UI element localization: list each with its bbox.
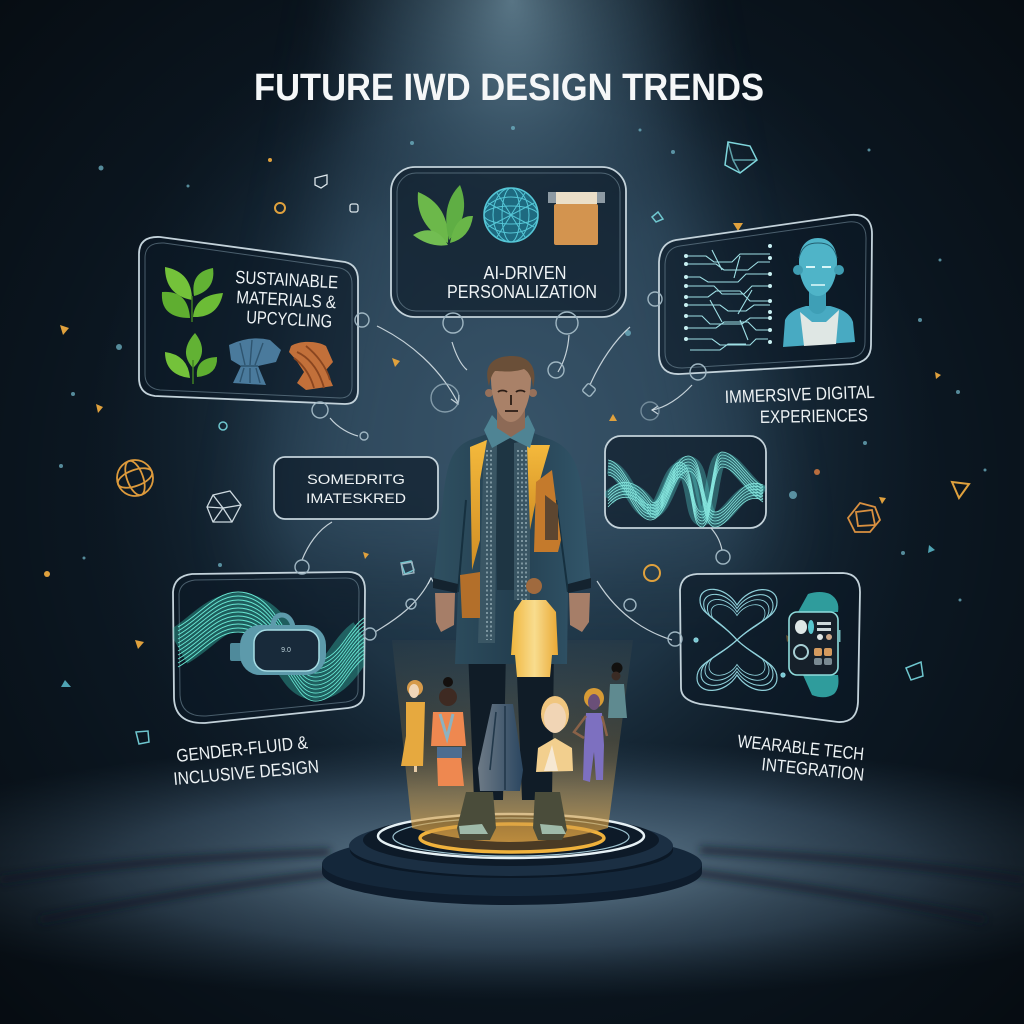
title: FUTURE IWD DESIGN TRENDS: [254, 67, 764, 109]
label: sustainable materials: MATERIALS &: [236, 287, 337, 312]
figure: dark coat on hanger: [478, 704, 523, 791]
icon: green leaves: [413, 185, 473, 246]
icon: VR headset: [230, 615, 326, 675]
floating particles: [44, 126, 986, 744]
label: AI-driven personalization: AI-DRIVEN: [484, 263, 566, 283]
label: AI-driven personalization: [447, 263, 597, 302]
figure: yellow dress left: [401, 680, 425, 772]
figure: orange outfit: [431, 677, 466, 786]
icon: folded denim garment: [229, 338, 281, 385]
chart: teal waveform ribbons: [608, 452, 763, 527]
cuffs: [433, 578, 591, 593]
gold lapels: [470, 440, 487, 570]
icon: VR headset: 9.0: [281, 647, 291, 654]
icon: orange polyhedron right: [848, 503, 880, 532]
icon: large green leaves: [162, 267, 223, 322]
scarf strips: [478, 440, 530, 643]
icon: orange wireframe sphere left: [115, 458, 155, 498]
icon: teal digital avatar: [783, 238, 855, 347]
icon: knot line art: [694, 589, 785, 690]
label: box text: [306, 471, 406, 506]
platform: [322, 814, 702, 905]
neck and head: [497, 395, 525, 437]
icon: tan fabric jar: [548, 192, 605, 245]
label: gender-fluid and inclusive design: GENDER-FLUID &: [175, 732, 309, 766]
connector arrows and nodes: [295, 292, 730, 646]
label: box text: IMATESKRED: [306, 490, 406, 506]
label: AI-driven personalization: PERSONALIZATION: [447, 282, 597, 302]
panel: sustainable materials and upcycling: [139, 237, 358, 404]
chart: teal flowing ribbon: [178, 592, 364, 701]
icon: circuit board traces: [684, 244, 772, 350]
label: wearable tech integration: [737, 731, 865, 785]
hands: [435, 593, 455, 632]
shirt: [494, 430, 530, 590]
arm creases: [458, 500, 568, 592]
label: immersive digital experiences: [724, 382, 875, 427]
label: sustainable materials: UPCYCLING: [246, 307, 333, 331]
hologram figures: [401, 578, 627, 791]
panel: sound wave: [605, 436, 766, 528]
icon: small green leaves: [165, 333, 217, 384]
panel: gender-fluid VR headset: [173, 572, 365, 723]
label: wearable tech integration: WEARABLE TECH: [737, 731, 865, 764]
boots: [457, 792, 496, 840]
label: immersive digital experiences: EXPERIENCES: [760, 405, 868, 427]
panel: garbled label box: [274, 457, 438, 519]
orange panels: [534, 470, 561, 552]
coat body: [433, 425, 591, 664]
label: box text: SOMEDRITG: [307, 471, 405, 487]
label: gender-fluid and inclusive design: [173, 732, 320, 789]
hologram beam: [392, 640, 633, 842]
icon: teal polyhedron top right: [725, 142, 757, 173]
panel: immersive digital experiences: [659, 215, 872, 374]
legs: [468, 650, 506, 800]
label: wearable tech integration: INTEGRATION: [761, 754, 865, 785]
label: sustainable materials: SUSTAINABLE: [235, 267, 339, 292]
panel: wearable tech: [680, 573, 860, 722]
figure: small teal person: [608, 662, 627, 718]
icon: folded tan fabric: [289, 342, 333, 390]
panel: AI-driven personalization: [391, 167, 626, 317]
icon: white wireframe polyhedron left: [207, 491, 241, 522]
collar: [484, 415, 535, 448]
icon: wireframe globe: [484, 188, 538, 242]
label: immersive digital experiences: IMMERSIVE DIGITAL: [724, 382, 875, 407]
label: sustainable materials: [235, 267, 339, 331]
central figure: [433, 356, 591, 840]
figure: blonde person: [536, 696, 573, 772]
figure: yellow dress center: [511, 578, 558, 677]
label: gender-fluid and inclusive design: INCLUSIVE DESIGN: [173, 756, 320, 789]
figure: purple outfit: [574, 688, 607, 782]
icon: smartwatch: [789, 592, 840, 697]
